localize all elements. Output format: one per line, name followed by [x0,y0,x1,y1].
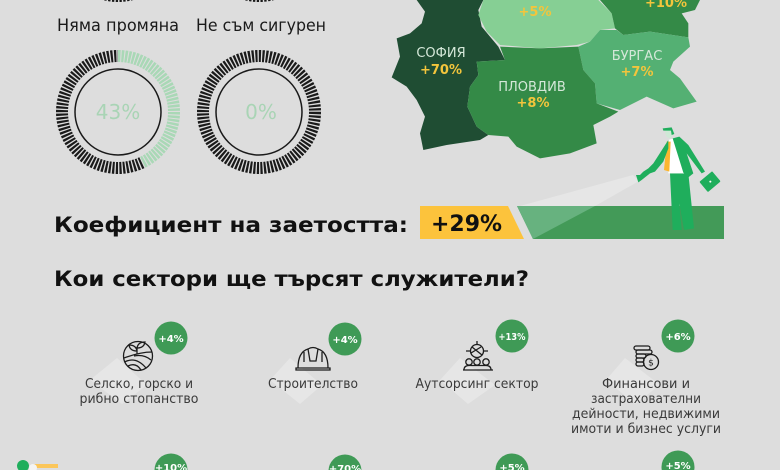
label: outsourcing: Аутсорсинг сектор [416,376,538,392]
label: not sure: Не съм сигурен [196,16,326,36]
label: agriculture: Селско, горско и [85,376,193,392]
value: Plovdiv: +8% [517,96,549,111]
badge: +6%: +6% [665,332,691,343]
badge: +10% [154,454,188,470]
label: finance: застрахователни [591,391,701,407]
heading: occupancy coefficient: Коефициент на заетостта: [54,213,408,237]
donut chart: 0%: 0% [245,100,277,124]
region: Sofia [392,0,505,150]
label: Burgas: БУРГАС [612,49,662,64]
icon: hard hat [296,348,330,370]
badge: +4%: +4% [158,334,184,345]
green band with light beam [517,175,724,239]
sector: outsourcing [416,320,538,404]
label: finance: имоти и бизнес услуги [571,421,721,437]
badge: +29% [420,206,524,239]
badge: +6% [662,320,694,352]
icon: cropped small figure bottom left [17,460,58,470]
icon: field and sprout [124,342,152,370]
value: north central: +5% [519,5,551,20]
value: Sofia: +70% [420,63,462,78]
figure: man with flashlight and briefcase [636,127,721,230]
badge: +29%: +29% [431,212,502,237]
bottom row badges [154,450,694,470]
sector: finance [571,320,721,437]
icon: people and globe [463,341,493,370]
label: Plovdiv: ПЛОВДИВ [498,80,566,95]
label: Sofia: СОФИЯ [416,46,466,61]
value: Burgas: +7% [621,65,653,80]
label: finance [571,376,721,437]
donut chart: 0% [203,56,315,168]
badge: +5% [496,454,528,470]
badge: +13%: +13% [498,332,526,343]
sector: agriculture: рибно стопанство [80,391,198,407]
heading: sectors: Кои сектори ще търсят служители? [54,267,529,291]
region: Burgas [578,30,697,110]
icon: coins [634,346,658,370]
donut chart: 43% [62,56,174,168]
region: north east [600,0,700,37]
sector: construction [268,322,362,404]
region: north central [478,0,615,48]
sector: agriculture [80,322,198,407]
badge: +5% right [662,450,694,470]
icon: coins: $ [648,358,654,368]
badge: +4%: +4% [332,335,358,346]
map of regions [392,0,700,158]
label: construction: Строителство [268,376,358,392]
label: no change: Няма промяна [57,16,179,36]
donut chart: 43%: 43% [96,100,140,124]
label: finance: Финансови и [602,376,690,392]
region: Plovdiv [467,47,618,158]
badge: +70% [328,454,362,470]
label: finance: дейности, недвижими [572,406,720,422]
